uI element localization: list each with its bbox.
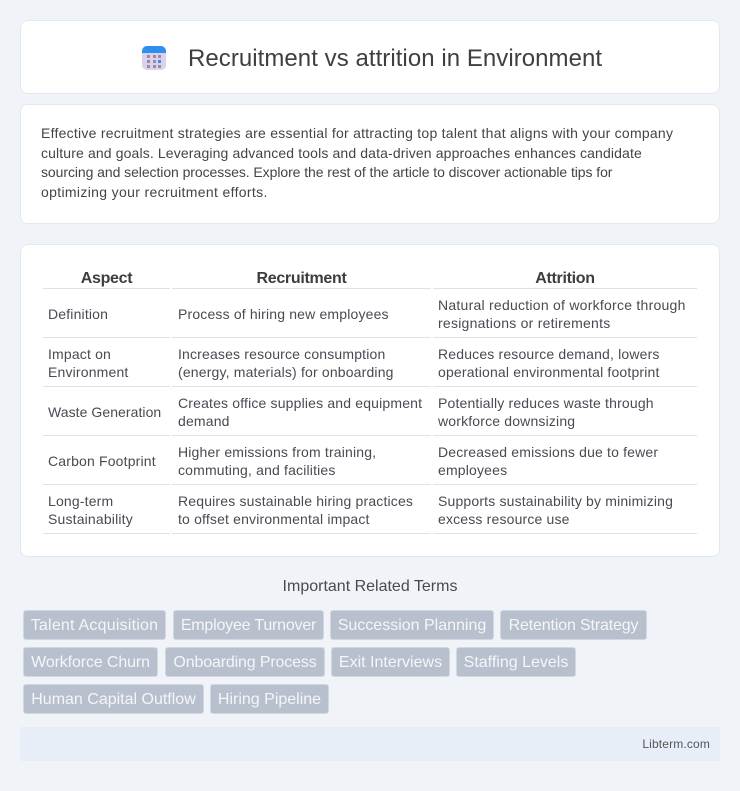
tag: Exit Interviews [339,654,442,671]
cell: sustainability recruitment: Requires sustainable hiring practices [178,493,413,509]
cell: waste recruitment [178,395,422,429]
tags: related terms [23,610,647,714]
tag: Talent Acquisition [31,617,158,634]
tag [23,647,158,677]
cell: impact recruitment [178,346,394,380]
cell: sustainability recruitment: to offset environmental impact [178,511,370,527]
row: impact on environment: Impact on [48,346,111,362]
table header: attrition: Attrition [535,270,595,287]
row: long-term sustainability [48,493,133,527]
cell: impact recruitment: Increases resource consumption [178,346,385,362]
cell: sustainability attrition: excess resource use [438,511,570,527]
footer [20,727,720,761]
tag: Retention Strategy [509,617,638,634]
row: long-term sustainability: Sustainability [48,511,133,527]
cell: sustainability recruitment [178,493,413,527]
row: carbon footprint: Carbon Footprint [48,453,156,469]
tag: Human Capital Outflow [31,691,196,708]
tag: Onboarding Process [173,654,317,671]
row: impact on environment [48,346,128,380]
tag [23,684,204,714]
tag [330,610,494,640]
cell: waste recruitment: demand [178,413,230,429]
cell: carbon recruitment: Higher emissions from training, [178,444,376,460]
cell: definition recruitment: Process of hiring new employees [178,306,389,322]
tag [210,684,329,714]
cell: waste attrition [438,395,654,429]
cell: waste recruitment: Creates office supplies and equipment [178,395,422,411]
panel: comparison table [20,244,720,557]
table header: recruitment: Recruitment [256,270,347,287]
icon: calendar [142,46,166,70]
cell: carbon recruitment [178,444,376,478]
cell: sustainability attrition [438,493,673,527]
tag: Workforce Churn [31,654,150,671]
tag [23,610,166,640]
cell: sustainability attrition: Supports sustainability by minimizing [438,493,673,509]
cell: carbon attrition: employees [438,462,507,478]
cell: definition attrition [438,297,686,331]
text block: introduction: Effective recruitment strategies are essential for attracting top talent that aligns with your company [41,125,673,141]
tag: Succession Planning [338,617,486,634]
cell: impact attrition [438,346,660,380]
tag [165,647,325,677]
cell: waste attrition: workforce downsizing [438,413,575,429]
tag [456,647,576,677]
tag [331,647,450,677]
cell: carbon attrition [438,444,658,478]
cell: waste attrition: Potentially reduces waste through [438,395,654,411]
cell: definition attrition: Natural reduction of workforce through [438,297,686,313]
text block: introduction: optimizing your recruitment efforts. [41,184,268,200]
row: waste generation: Waste Generation [48,404,161,420]
tag: Hiring Pipeline [218,691,321,708]
text block: introduction: sourcing and selection processes. Explore the rest of the article to discover actionable tips for [41,164,612,180]
panel: introduction [20,104,720,224]
footer credit: Libterm.com [642,737,710,751]
heading: related terms: Important Related Terms [283,578,457,595]
tag [173,610,324,640]
table header: aspect: Aspect [81,270,132,287]
cell: carbon recruitment: commuting, and facilities [178,462,336,478]
cell: carbon attrition: Decreased emissions due to fewer [438,444,658,460]
cell: impact recruitment: (energy, materials) for onboarding [178,364,394,380]
cell: definition attrition: resignations or retirements [438,315,610,331]
cell: impact attrition: Reduces resource demand, lowers [438,346,660,362]
panel: header [20,20,720,94]
text block: introduction: culture and goals. Leveraging advanced tools and data-driven approaches enhances candidate [41,145,642,161]
row: definition: Definition [48,306,108,322]
cell: impact attrition: operational environmental footprint [438,364,660,380]
tag: Employee Turnover [181,617,316,634]
row: impact on environment: Environment [48,364,128,380]
row: long-term sustainability: Long-term [48,493,113,509]
tag: Staffing Levels [464,654,568,671]
tag [500,610,647,640]
title: Recruitment vs attrition in Environment [188,45,602,72]
text block: introduction [41,125,673,200]
